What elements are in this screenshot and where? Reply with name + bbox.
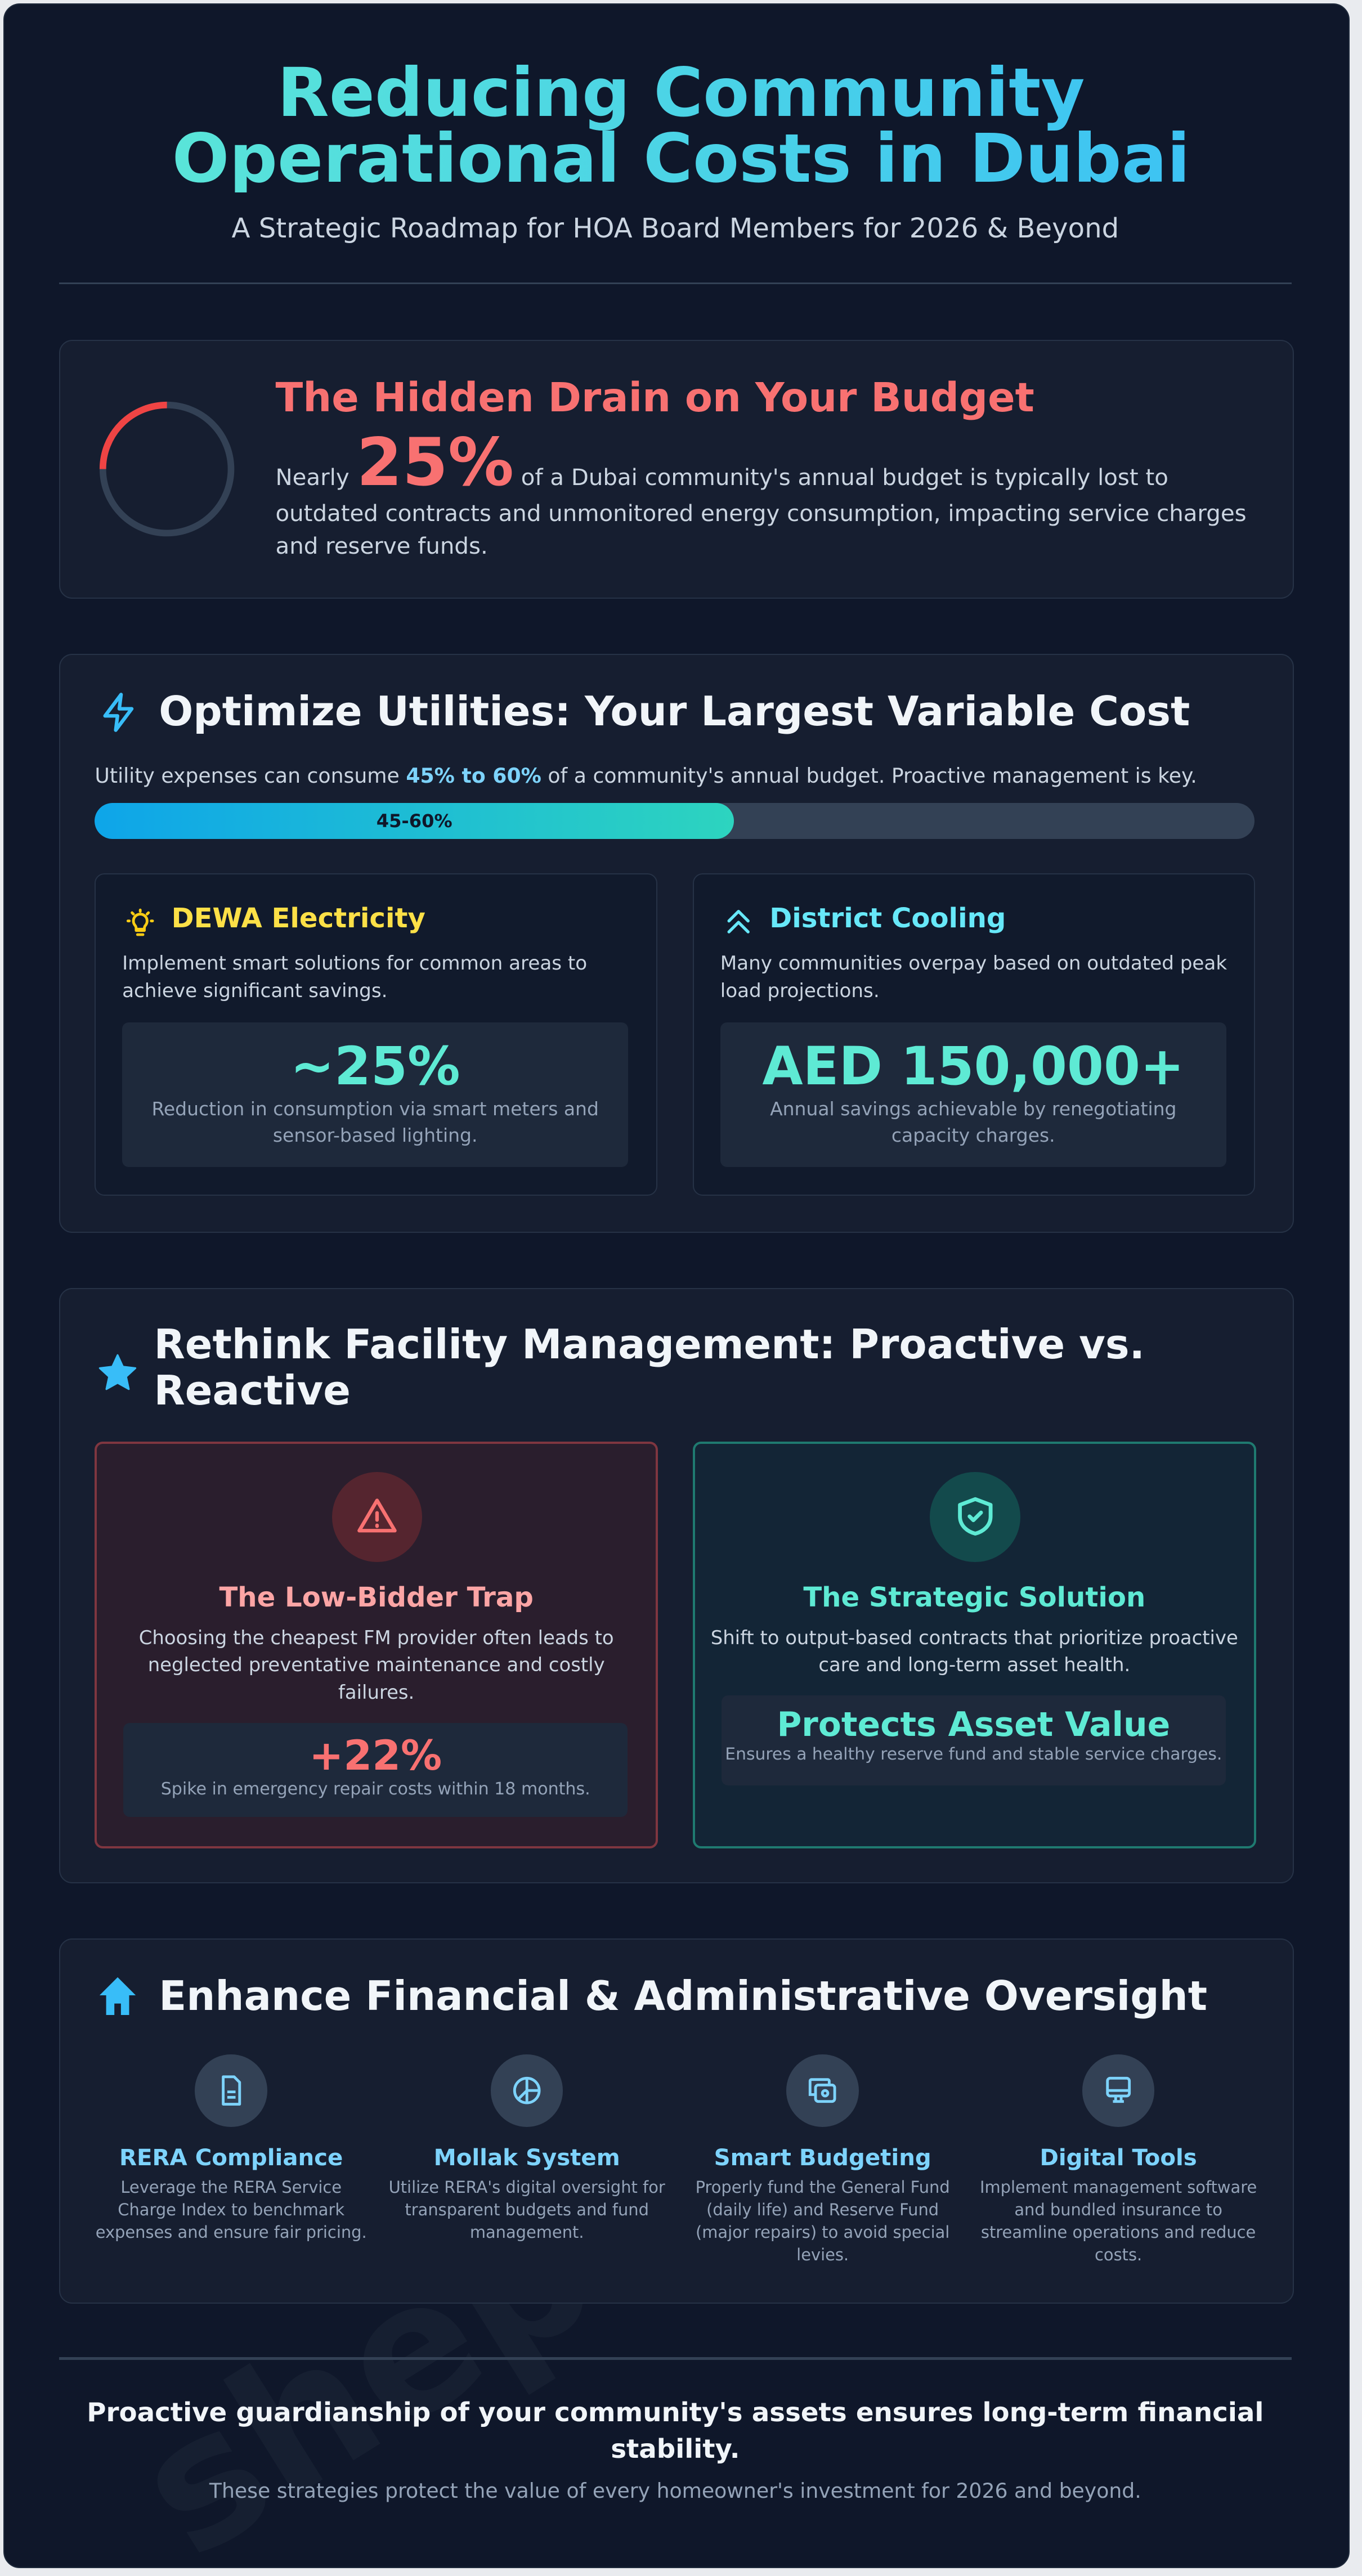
stat box: Annual savings achievable by renegotiating capacity charges. — [770, 1098, 1176, 1146]
stat box — [122, 1022, 628, 1167]
intro text: Utility expenses can consume 45% to 60% of a community's annual budget. Proactive management is key. — [95, 764, 1197, 788]
title: Reducing Community — [277, 54, 1085, 132]
text: Choosing the cheapest FM provider often leads to neglected preventative maintenance and costly failures. — [139, 1627, 614, 1703]
stat box: Spike in emergency repair costs within 18 months. — [161, 1779, 590, 1799]
progress bar — [95, 803, 1255, 839]
item: Smart budgeting — [696, 2054, 950, 2264]
heading: Optimize Utilities: Your Largest Variable Cost — [159, 688, 1190, 735]
subtitle: A Strategic Roadmap for HOA Board Members for 2026 & Beyond — [231, 213, 1119, 244]
stat box: AED 150,000+ — [762, 1036, 1184, 1097]
item: Digital tools: Implement management software and bundled insurance to streamline operations and reduce costs. — [980, 2178, 1257, 2264]
stat box — [720, 1022, 1226, 1167]
card: strategic solution — [693, 1442, 1256, 1848]
heading: District Cooling — [769, 903, 1006, 934]
stat box: Protects Asset Value — [777, 1705, 1170, 1744]
heading: The Hidden Drain on Your Budget — [276, 374, 1034, 421]
body text: Nearly 25% of a Dubai community's annual budget is typically lost to outdated contracts and unmonitored energy consumption, impacting service charges and reserve funds. — [276, 424, 1247, 559]
icon: lightning — [104, 693, 134, 732]
heading: Rethink Facility Management: Proactive vs. Reactive — [154, 1321, 1145, 1414]
title: Operational Costs in Dubai — [172, 120, 1190, 198]
title — [0, 61, 1362, 192]
footer conclusion: Proactive guardianship of your community's assets ensures long-term financial stability. — [87, 2398, 1264, 2465]
item: Smart budgeting: Properly fund the General Fund (daily life) and Reserve Fund (major repairs) to avoid special levies. — [696, 2178, 950, 2264]
footer subtext: These strategies protect the value of every homeowner's investment for 2026 and beyond. — [209, 2479, 1141, 2503]
progress bar: 45-60% — [377, 810, 452, 832]
item: Digital tools — [980, 2054, 1257, 2264]
panel: facility management — [59, 1288, 1294, 1883]
heading: DEWA Electricity — [172, 903, 425, 934]
heading: Enhance Financial & Administrative Oversight — [159, 1972, 1207, 2019]
panel: oversight — [59, 1938, 1294, 2304]
stat box: Reduction in consumption via smart meters and sensor-based lighting. — [151, 1098, 599, 1146]
panel: hidden drain — [59, 340, 1294, 599]
icon: chevrons — [727, 910, 750, 934]
panel: utilities — [59, 654, 1294, 1233]
heading: The Low-Bidder Trap — [219, 1582, 534, 1613]
item: Mollak: Mollak System — [434, 2145, 620, 2171]
stat box: ~25% — [290, 1036, 460, 1097]
icon: bulb — [126, 908, 154, 936]
stat box — [722, 1695, 1226, 1785]
card: District cooling — [693, 873, 1255, 1196]
item: RERA: RERA Compliance — [119, 2145, 343, 2171]
icon: ring gauge — [99, 402, 234, 537]
text: Many communities overpay based on outdated peak load projections. — [720, 952, 1227, 1002]
item: Mollak — [389, 2054, 665, 2242]
stat box — [123, 1723, 628, 1817]
text: Implement smart solutions for common areas to achieve significant savings. — [122, 952, 587, 1002]
icon: warning — [332, 1472, 422, 1562]
stat box: +22% — [309, 1732, 442, 1780]
item: Smart budgeting: Smart Budgeting — [714, 2145, 931, 2171]
icon: star — [99, 1354, 136, 1390]
card: low bidder trap — [95, 1442, 658, 1848]
item: Mollak: Utilize RERA's digital oversight for transparent budgets and fund management. — [389, 2178, 665, 2242]
stat box: Ensures a healthy reserve fund and stable service charges. — [725, 1744, 1222, 1764]
item: RERA — [96, 2054, 367, 2242]
text: Shift to output-based contracts that prioritize proactive care and long-term asset health. — [711, 1627, 1238, 1676]
icon: house — [100, 1977, 136, 2015]
item: Digital tools: Digital Tools — [1040, 2145, 1197, 2171]
icon: shield — [930, 1472, 1020, 1562]
item: RERA: Leverage the RERA Service Charge Index to benchmark expenses and ensure fair pricing. — [96, 2178, 367, 2242]
heading: The Strategic Solution — [803, 1582, 1145, 1613]
card: DEWA — [95, 873, 657, 1196]
